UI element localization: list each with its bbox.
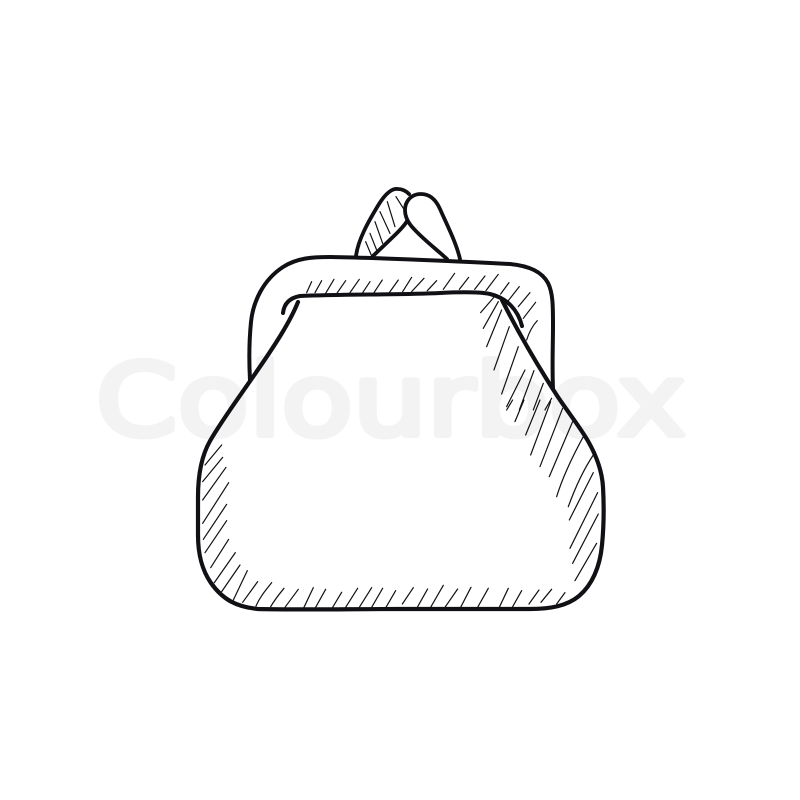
hatch: right side shading: [507, 400, 598, 581]
clasp: right lobe: [405, 194, 460, 259]
purse frame: [249, 257, 553, 389]
hatch: frame shading: [307, 273, 552, 410]
hatch: bottom shading: [243, 582, 565, 607]
hatch: left side shading: [203, 445, 247, 600]
purse body outline: [198, 300, 604, 609]
clasp: left lobe: [356, 189, 409, 256]
frame inner lip: [283, 292, 522, 326]
hatch: left clasp shading: [366, 197, 403, 256]
icon: coin purse: [198, 189, 604, 609]
watermark: Colourbox: Colourbox: [96, 342, 686, 459]
